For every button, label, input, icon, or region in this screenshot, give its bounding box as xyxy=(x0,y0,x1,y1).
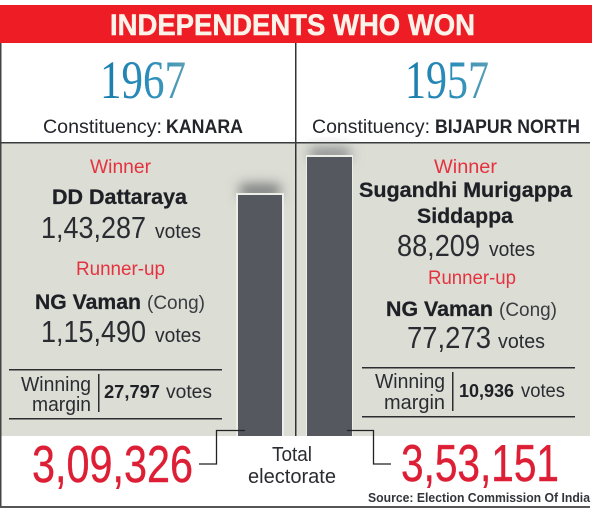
winning margin xyxy=(362,367,575,418)
winner votes: votes xyxy=(489,239,535,261)
winning margin xyxy=(9,369,222,420)
total electorate 1957: 3,53,151 xyxy=(401,435,559,493)
panel: 1967 header xyxy=(43,50,243,138)
runner-up name: NG Vaman xyxy=(386,298,493,321)
constituency Kanara: Constituency: xyxy=(43,117,162,138)
runner-up name xyxy=(35,291,205,314)
winning margin: 10,936 xyxy=(459,381,514,401)
winning margin: margin xyxy=(32,394,91,416)
winner name: Sugandhi Murigappa xyxy=(359,179,572,202)
winner name: Siddappa xyxy=(417,205,513,228)
winner votes xyxy=(397,228,535,263)
runner-up label: Runner-up xyxy=(76,259,165,280)
winning margin: Winning xyxy=(375,371,445,393)
winner votes: 88,209 xyxy=(397,228,480,263)
runner-up votes xyxy=(407,320,545,355)
winning margin: votes xyxy=(521,381,565,402)
winning margin: Winning xyxy=(21,374,91,396)
runner-up name: NG Vaman xyxy=(35,291,141,314)
winning margin: 27,797 xyxy=(104,382,160,402)
runner-up name: (Cong) xyxy=(147,293,205,314)
panel: 1957 results xyxy=(359,157,575,418)
panel: grey data area xyxy=(1,143,590,436)
runner-up votes: 1,15,490 xyxy=(41,314,146,349)
panel: 1967 header: KANARA xyxy=(166,117,243,138)
panel: 1957 header: BIJAPUR NORTH xyxy=(435,117,580,138)
runner-up name xyxy=(386,298,557,321)
winner name xyxy=(359,179,572,228)
runner-up label: Runner-up xyxy=(428,268,516,289)
constituency Bijapur North: Constituency: xyxy=(312,117,430,138)
winner label: Winner xyxy=(90,157,152,178)
winning margin: margin xyxy=(384,392,445,414)
year 1967: 1967 xyxy=(100,50,186,110)
winner label: Winner xyxy=(434,157,498,178)
winner votes: votes xyxy=(155,221,201,243)
connector: 1967 bar to total xyxy=(199,430,245,464)
runner-up votes: 77,273 xyxy=(407,320,491,355)
winning margin: votes xyxy=(166,382,212,403)
connector: 1957 bar to total xyxy=(347,430,391,464)
total electorate 1967: 3,09,326 xyxy=(32,436,193,494)
total electorate label xyxy=(248,444,336,488)
panel: 1967 results xyxy=(9,157,222,420)
total electorate label: Total xyxy=(272,444,312,466)
title banner: INDEPENDENTS WHO WON xyxy=(110,9,475,42)
bar: 1967 electorate xyxy=(236,184,284,436)
title banner xyxy=(0,5,592,43)
runner-up name: (Cong) xyxy=(499,300,557,321)
source note: Source: Election Commission Of India xyxy=(368,490,591,505)
bar: 1957 electorate xyxy=(306,148,353,436)
winner name: DD Dattaraya xyxy=(52,186,187,209)
runner-up votes: votes xyxy=(155,325,201,347)
panel: 1957 header xyxy=(312,50,580,138)
total electorate label: electorate xyxy=(248,466,336,488)
runner-up votes: votes xyxy=(498,331,545,353)
winner votes: 1,43,287 xyxy=(41,210,146,245)
year 1957: 1957 xyxy=(405,50,489,110)
